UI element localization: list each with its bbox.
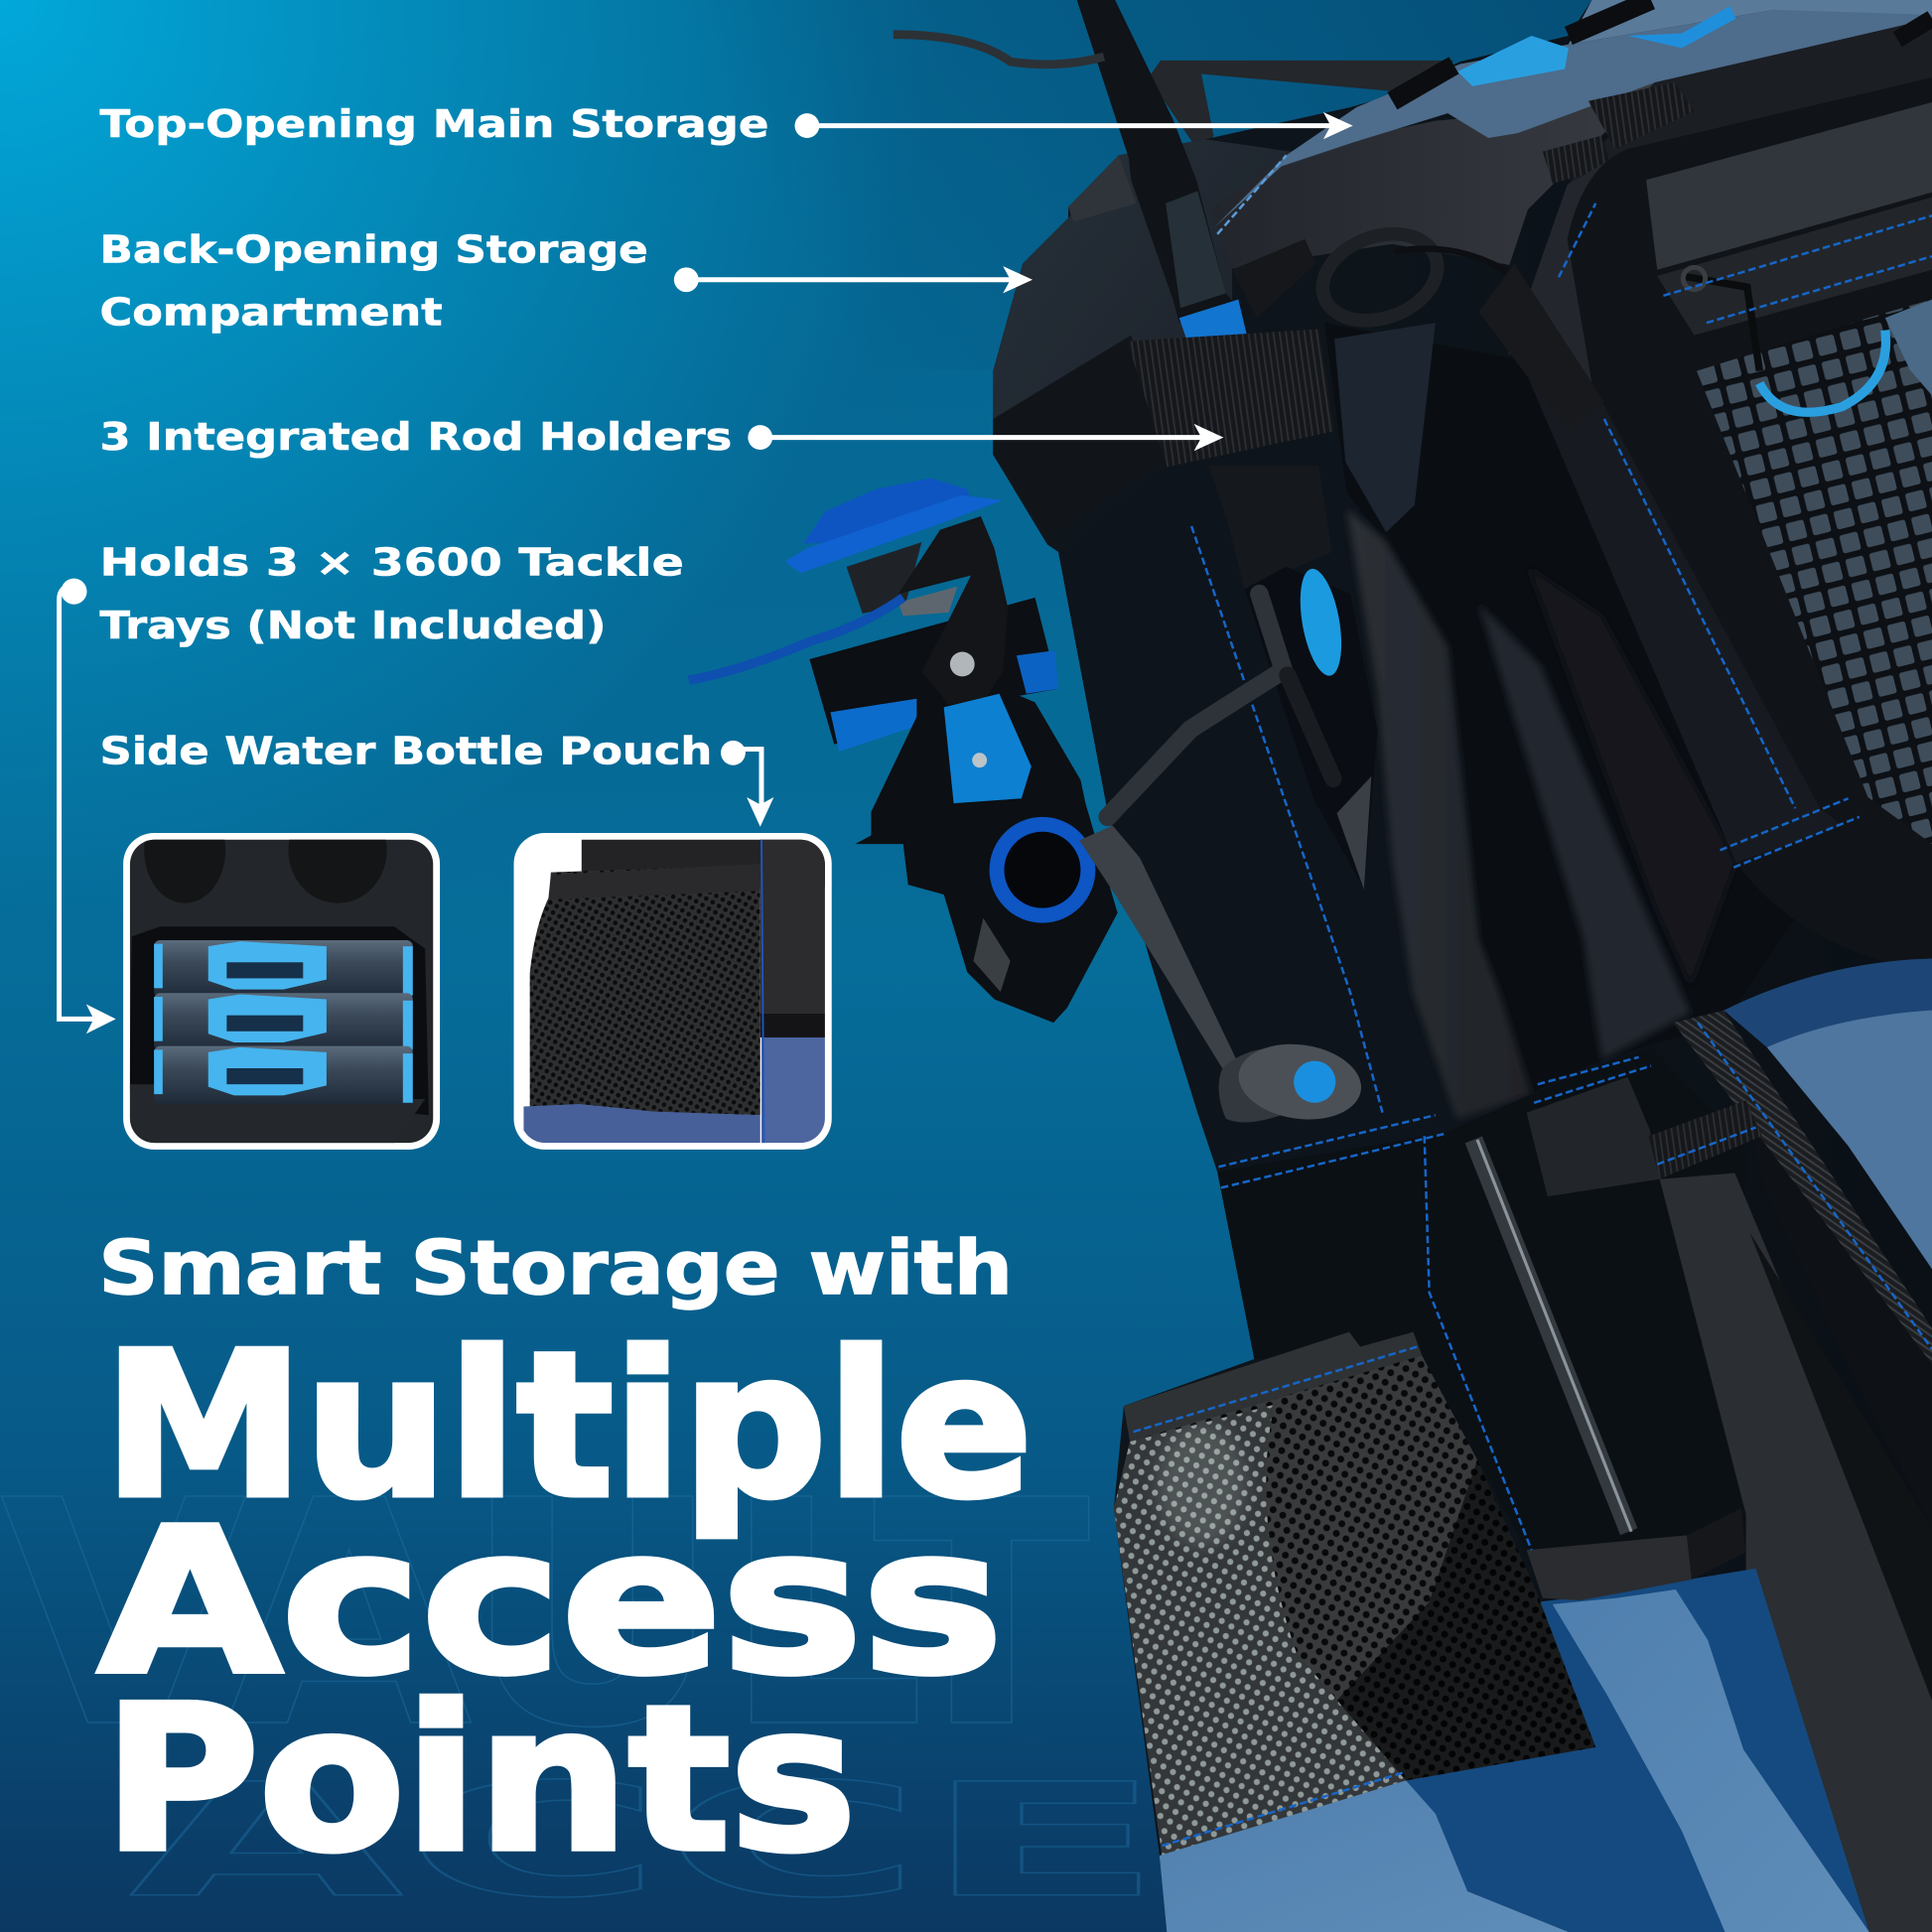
upper grey panel [1211,82,1655,269]
heading line 3: Access [98,1486,1003,1719]
heading line 4: Points [103,1664,857,1896]
dark panel right of strip [1568,19,1932,185]
bright spot on mesh [1157,1423,1246,1547]
top carry handle [1149,61,1453,155]
hanging strap tab [1478,264,1604,431]
D-ring grommet [1683,267,1706,290]
reel crank arm [1079,826,1236,1068]
shoulder panel [993,139,1290,538]
blue D-ring puller [1759,331,1886,412]
tray 1 [154,940,413,998]
reel body sheen [973,918,1011,992]
reel blue translucent cover [944,694,1032,803]
reel cover screw [972,753,987,767]
central black body panel [1058,431,1528,1172]
heading line 2: Multiple [103,1310,1033,1542]
black shade on mesh [1337,1460,1595,1780]
pouch top band [548,864,760,899]
callout: top-opening main storage [100,102,1353,147]
heading [98,1225,1033,1896]
tray 3 [154,1046,413,1104]
inset frame [514,833,832,1150]
upper fold highlight [1334,323,1436,532]
side mesh pocket light area [1114,1405,1406,1856]
blue-grey top strip [1213,0,1932,228]
pocket mesh [1697,300,1932,844]
inset bag backing [128,838,435,1144]
rod tip guide [894,35,1104,65]
lower dark body [1217,1047,1746,1550]
inset floor fabric [129,1084,425,1144]
shoulder strap band [993,336,1167,538]
bottom strap [1527,1508,1746,1600]
pocket inner gray panel [1646,102,1932,270]
blue zipper pullers [1392,0,1932,101]
reel blue dome [803,479,971,543]
callout: top-opening main storage: Top-Opening Main Storage [100,102,768,147]
reel rotor arm [898,516,1008,705]
bottom light blue fabric [1160,1780,1569,1932]
reel line wrap [898,587,957,617]
reel blue ring [997,824,1088,915]
strap loop [1649,1100,1762,1179]
reel blue bail wire [689,598,903,680]
callout: back-opening storage compartment [100,227,1033,336]
reel rear blue [1017,650,1058,694]
callout: tackle trays: Trays (Not Included) [100,604,607,648]
lit fold right [1478,604,1691,1059]
pouch side band [760,1013,827,1037]
upper blue patch light [1767,1011,1932,1269]
reel rotor screw [950,652,975,676]
webbing handles on top [1588,82,1694,149]
grey side panel [1660,1173,1932,1932]
ghost watermark lettering: VAULT [0,1435,1092,1796]
inset photo: tackle trays [123,797,440,1150]
grip sheen [1337,776,1371,890]
carabiner webbing [1232,239,1315,318]
carabiner clip [1311,218,1514,336]
pouch blue base [523,1104,760,1144]
soft fold group [1346,509,1736,1119]
lower right dark corner [1749,1232,1932,1701]
pouch blue lower panel [761,1037,827,1144]
inset frame [123,833,440,1150]
side pocket elastic band [1124,1332,1422,1442]
rod mid section [1166,191,1226,308]
reel spool drum [847,542,921,614]
reel foot arm [1108,594,1333,817]
light blue gusset fold [1553,1589,1869,1932]
reel gearbox drum [809,598,1058,745]
blue ferrule [1179,300,1247,349]
callout: side water bottle pouch [100,729,773,827]
reel flange [785,495,1003,573]
ghost watermark lettering [0,1435,1165,1932]
spinning reel [689,479,1366,1127]
tray 2 [154,993,413,1051]
callout: back-opening storage compartment: Back-Opening Storage [100,227,648,272]
side grab loop [1068,155,1136,221]
upper blue patch dark [1724,959,1932,1047]
blue grip insert [1294,566,1348,679]
front pocket body [1568,77,1932,973]
blue stitching [1134,155,1932,1846]
side mesh pocket dark [1114,1355,1595,1856]
blue panel behind D-ring [1885,300,1932,395]
pouch mesh [530,865,760,1115]
reel front body [855,689,1118,1023]
inset compartment opening [129,926,429,1115]
glossy grip [1244,567,1378,890]
callout: side water bottle pouch: Side Water Bottle Pouch [100,729,712,773]
rod sleeve foam fold [1346,509,1532,1119]
rear blue gusset [1406,1569,1869,1932]
diagonal strap [1673,1011,1932,1364]
ghost watermark lettering: ACCE [129,1751,1165,1932]
rod holder velcro band [1128,329,1334,467]
pouch bag body [582,838,827,888]
black shadow behind grey panel [1724,1023,1932,1528]
reel blue band [830,699,916,752]
callout: tackle trays [60,541,684,1034]
zipper tape [1657,198,1932,336]
black pull cord [1682,276,1759,371]
callout: integrated rod holders: 3 Integrated Rod Holders [100,415,732,460]
photo: fishing backpack [689,0,1932,1932]
chrome rod section [1473,1140,1631,1532]
backpack silhouette [993,0,1932,1932]
panel left of front pocket [1508,149,1651,383]
grey fabric patch center [1527,1077,1660,1196]
callout: back-opening storage compartment: Compartment [100,291,443,336]
top edge right [1569,0,1932,45]
callout: integrated rod holders [100,415,1223,460]
reel seat [1208,466,1332,589]
fishing rod upper section [1077,0,1238,323]
pocket side strip [1520,359,1842,863]
shadow fold region [1324,323,1799,1094]
reel handle knob [1219,1036,1366,1127]
dark slate fold [1528,567,1736,986]
inset photo: water bottle pouch [514,833,832,1150]
heading line 1: Smart Storage with [98,1225,1013,1311]
callout: tackle trays: Holds 3 × 3600 Tackle [100,541,684,586]
